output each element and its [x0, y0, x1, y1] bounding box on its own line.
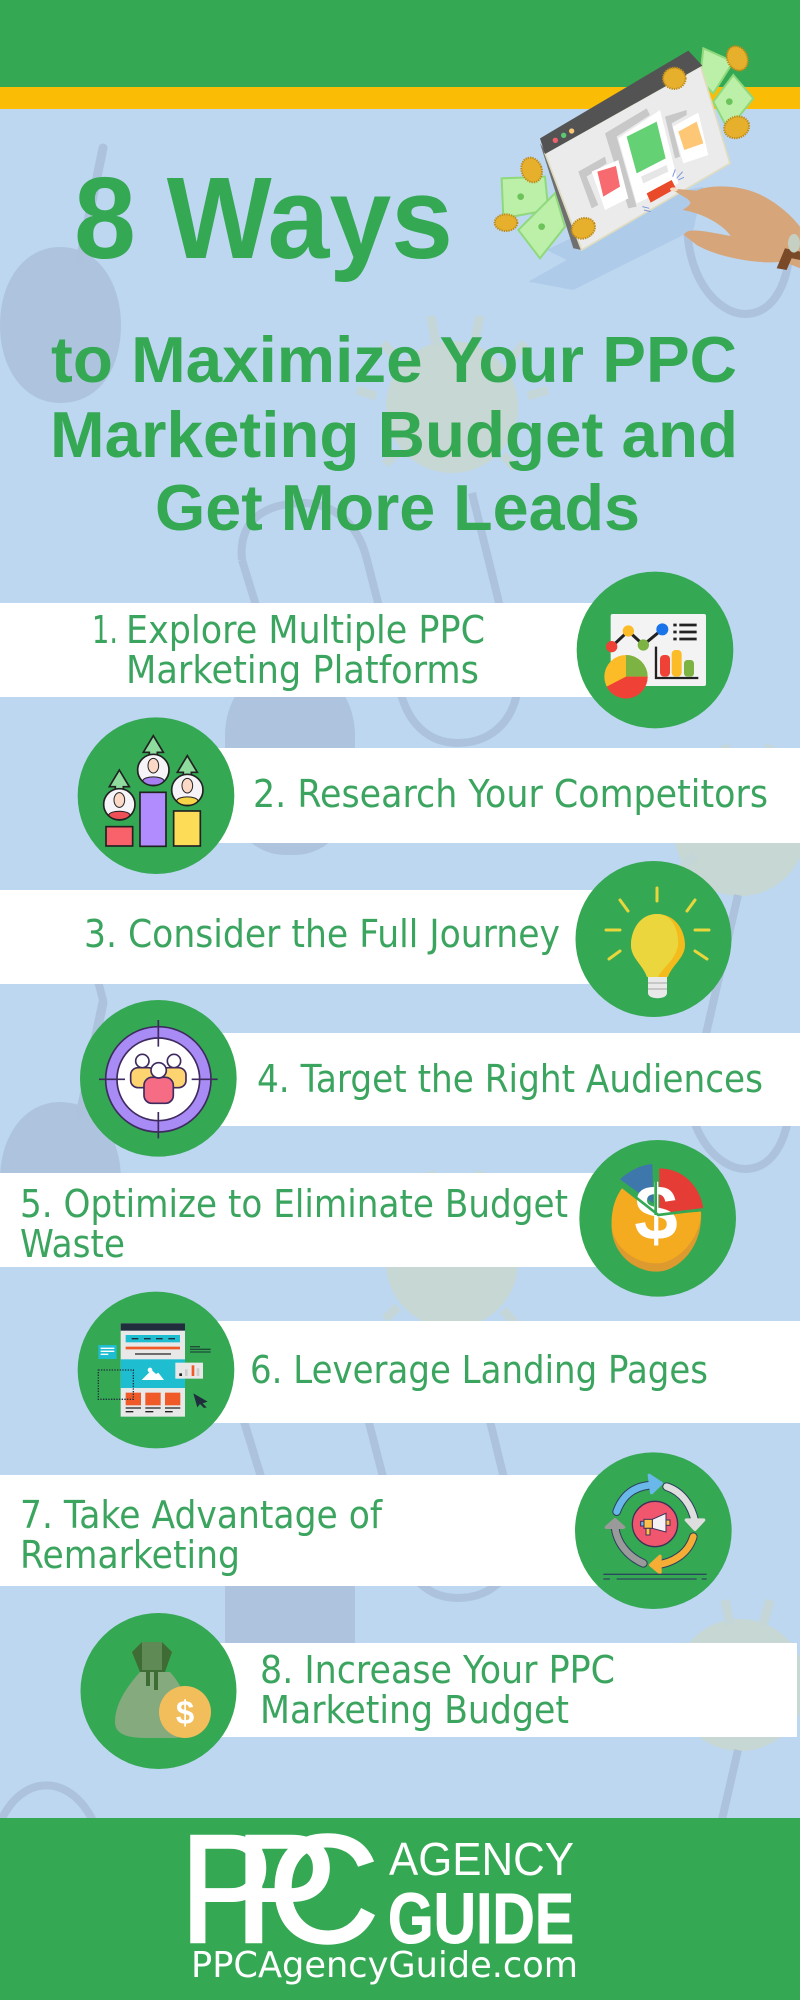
- step 1 text: Marketing Platforms: [126, 648, 479, 692]
- step 5 text: [20, 1182, 568, 1266]
- panel: step 8: [80, 1613, 797, 1769]
- illustration: hand clicking browser ad with money: [495, 43, 800, 290]
- step 6 text: 6. Leverage Landing Pages: [250, 1348, 708, 1392]
- step 5 text: 5. Optimize to Eliminate Budget: [20, 1182, 568, 1226]
- step 7 text: [20, 1493, 383, 1577]
- icon: remarketing cycle: [575, 1452, 732, 1609]
- icon: light bulb: [576, 861, 732, 1017]
- icon: audience target: [80, 1000, 237, 1157]
- logo: PPC monogram: P: [180, 1803, 272, 1976]
- footer band: [0, 1803, 800, 2000]
- step 2 text: 2. Research Your Competitors: [253, 772, 768, 816]
- logo: AGENCY: AGENCY: [389, 1833, 574, 1885]
- icon: landing page: [78, 1292, 234, 1448]
- panel: step 5: [0, 1140, 736, 1297]
- subtitle: [50, 323, 738, 544]
- logo: GUIDE: GUIDE: [388, 1880, 574, 1959]
- step 5 text: Waste: [20, 1222, 125, 1266]
- panel: step 1: [0, 572, 733, 728]
- logo: PPC monogram: [180, 1803, 379, 1976]
- step 8 text: 8. Increase Your PPC: [260, 1648, 615, 1692]
- panel: step 3: [0, 861, 732, 1017]
- step 7 text: 7. Take Advantage of: [20, 1493, 383, 1537]
- step 1 text: [92, 608, 485, 692]
- panel: step 2: [78, 717, 800, 874]
- logo: PPC monogram: C: [268, 1803, 379, 1975]
- icon: money bag: [80, 1613, 236, 1769]
- step 1 text: Explore Multiple PPC: [126, 608, 485, 652]
- website url: PPCAgencyGuide.com: [191, 1945, 578, 1986]
- subtitle: Get More Leads: [155, 471, 640, 544]
- panel: step 6: [78, 1292, 800, 1448]
- step 7 text: Remarketing: [20, 1533, 240, 1577]
- step 3 text: 3. Consider the Full Journey: [84, 912, 560, 956]
- step 8 text: Marketing Budget: [260, 1688, 569, 1732]
- panel: step 4: [80, 1000, 800, 1157]
- icon: charts dashboard: [577, 572, 733, 728]
- icon: competitors bars: [78, 717, 234, 874]
- icon: budget pie coin: $: [634, 1168, 678, 1256]
- subtitle: to Maximize Your PPC: [51, 323, 737, 396]
- icon: budget pie coin: [579, 1140, 736, 1297]
- header band: [0, 0, 800, 109]
- step 8 text: [260, 1648, 615, 1732]
- title: 8 Ways: 8 Ways: [74, 153, 453, 283]
- panel: step 7: [0, 1452, 732, 1609]
- logo: PPC monogram: P: [234, 1803, 337, 1975]
- subtitle: Marketing Budget and: [50, 398, 738, 471]
- step 1 text: 1.: [92, 608, 118, 652]
- icon: money bag: $: [176, 1694, 194, 1731]
